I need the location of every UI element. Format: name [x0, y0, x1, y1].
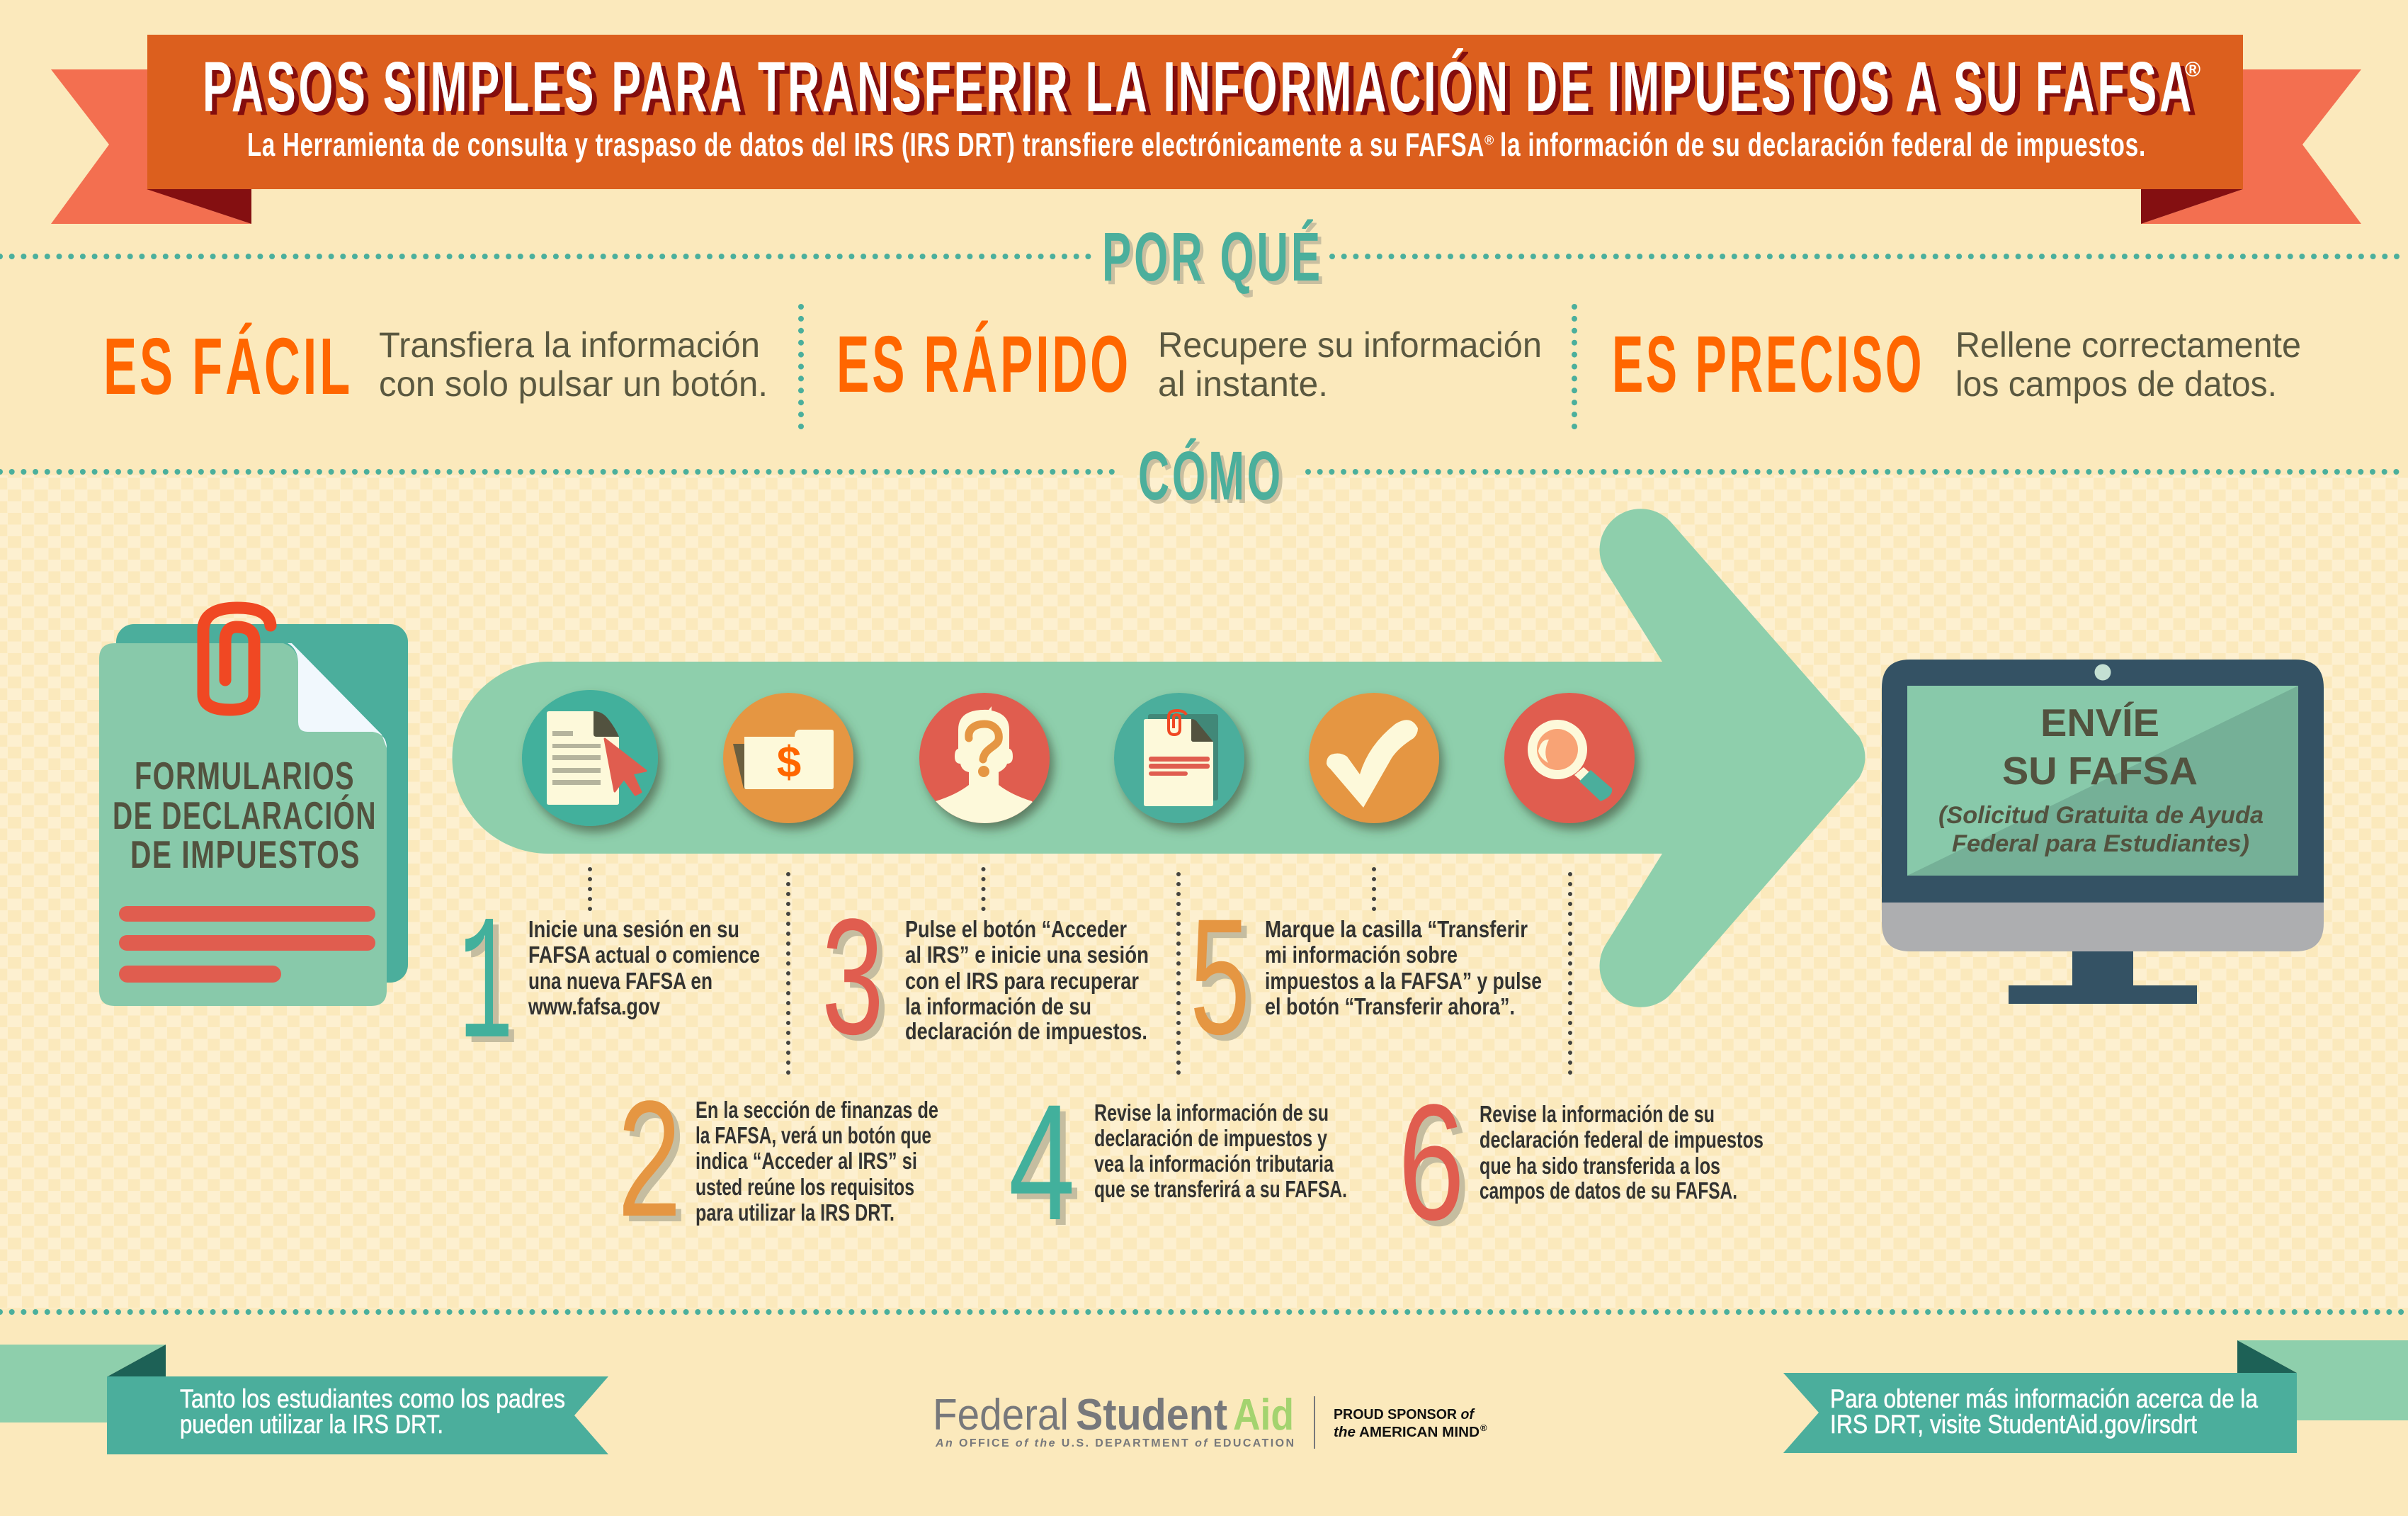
back sheet: [733, 744, 747, 788]
screen text: ENVÍE: [2040, 701, 2159, 745]
paper clip: [1169, 711, 1186, 735]
ribbon tail: [0, 1345, 166, 1422]
dollar sign: $: [777, 738, 801, 787]
ribbon text: IRS DRT, visite StudentAid.gov/irsdrt: [1830, 1410, 2198, 1439]
step 3 text: con el IRS para recuperar: [905, 968, 1139, 994]
screen text: Federal para Estudiantes): [1952, 830, 2249, 857]
left fold: [147, 189, 251, 224]
sponsor text: ®: [1480, 1422, 1487, 1433]
monitor: envíe su fafsa: [1882, 660, 2324, 1004]
logo: federal student aid: [933, 1391, 1487, 1449]
step 2: [618, 1067, 938, 1251]
es rápido heading: ES RÁPIDO: [836, 319, 1131, 409]
screen: [1907, 686, 2298, 876]
step 6 text: [1480, 1101, 1764, 1204]
circle: [522, 690, 658, 826]
es preciso description: los campos de datos.: [1955, 364, 2277, 404]
ribbon fold: [2237, 1340, 2297, 1373]
panel: es rápido: [836, 319, 1542, 409]
monitor base: [1882, 900, 2324, 951]
es rápido description: al instante.: [1158, 364, 1328, 404]
icon: step 1 document and cursor: [522, 690, 658, 826]
wordmark: [933, 1391, 1294, 1439]
question mark: [969, 724, 999, 777]
paper clip: [203, 608, 271, 710]
connector: [1574, 767, 1589, 781]
monitor frame: [1882, 660, 2324, 903]
circle: [1114, 693, 1244, 823]
step 6 text: declaración federal de impuestos: [1480, 1126, 1764, 1153]
banner body: [147, 35, 2243, 189]
step 4 text: que se transferirá a su FAFSA.: [1094, 1176, 1347, 1202]
ribbon text: [1830, 1384, 2258, 1439]
step 1 text: FAFSA actual o comience: [528, 941, 760, 968]
step 6 text: campos de datos de su FAFSA.: [1480, 1177, 1737, 1204]
sponsor text: the AMERICAN MIND: [1334, 1425, 1480, 1440]
ribbon text: Para obtener más información acerca de la: [1830, 1384, 2258, 1413]
es fácil description: con solo pulsar un botón.: [379, 364, 768, 404]
document title: FORMULARIOS: [135, 754, 355, 798]
step 2 text: En la sección de finanzas de: [695, 1097, 938, 1123]
text lines: [552, 731, 601, 785]
es preciso heading: ES PRECISO: [1612, 319, 1924, 409]
es fácil description: Transfiera la información: [379, 325, 760, 365]
step 5 text: el botón “Transferir ahora”.: [1265, 993, 1515, 1019]
check: [1327, 720, 1418, 808]
screen reflection: [1907, 686, 2298, 876]
subtitle: la información de su declaración federal de impuestos.: [1500, 126, 2146, 163]
step 4 text: [1094, 1099, 1347, 1202]
title banner: [51, 35, 2361, 224]
step 3 text: Pulse el botón “Acceder: [905, 916, 1127, 942]
step 5 text: impuestos a la FAFSA” y pulse: [1265, 968, 1542, 994]
circle: [1309, 693, 1439, 823]
step 6 text: Revise la información de su: [1480, 1101, 1715, 1127]
monitor stand: [2009, 949, 2197, 1004]
subtitle: ®: [1484, 133, 1494, 147]
document: [547, 711, 619, 805]
es rápido description: Recupere su información: [1158, 325, 1542, 365]
es fácil description: [379, 325, 768, 404]
step 4 text: vea la información tributaria: [1094, 1150, 1334, 1177]
icon: step 4 clipped document: [1114, 693, 1244, 823]
es preciso description: Rellene correctamente: [1955, 325, 2301, 365]
back sheet: [116, 624, 408, 983]
logo divider: [1314, 1396, 1315, 1449]
circle: [1504, 693, 1635, 823]
ribbon body: [107, 1376, 608, 1454]
logo tagline: An OFFICE of the U.S. DEPARTMENT of EDUCATION: [935, 1437, 1294, 1449]
sponsor text: [1334, 1407, 1487, 1440]
wordmark: Aid: [1233, 1391, 1294, 1439]
step 3 text: [905, 916, 1149, 1044]
step 2 text: [695, 1097, 938, 1226]
icon: step 5 check mark: [1309, 693, 1439, 823]
handle: [1579, 770, 1612, 801]
step 5 text: mi información sobre: [1265, 941, 1458, 968]
es rápido description: [1158, 325, 1542, 404]
screen text: (Solicitud Gratuita de Ayuda: [1938, 802, 2264, 829]
wordmark: Student: [1076, 1391, 1227, 1439]
step 2 text: usted reúne los requisitos: [695, 1174, 914, 1200]
number 4: 4: [1009, 1070, 1075, 1255]
step 2 text: para utilizar la IRS DRT.: [695, 1199, 895, 1226]
footer ribbon: left: [0, 1345, 608, 1454]
step 2 text: la FAFSA, verá un botón que: [695, 1122, 931, 1148]
screen text: SU FAFSA: [2002, 749, 2198, 793]
ribbon tail: [2237, 1340, 2408, 1420]
document title: DE DECLARACIÓN: [113, 793, 377, 837]
camera: [2095, 664, 2111, 680]
back sheet: [1148, 714, 1218, 801]
highlight: [1538, 740, 1549, 763]
title registered mark: ®: [2185, 58, 2200, 81]
wordmark: Federal: [933, 1391, 1069, 1439]
document lines: [119, 906, 375, 983]
number 6: 6: [1398, 1070, 1465, 1255]
step 3 text: al IRS” e inicie una sesión: [905, 941, 1149, 968]
lines: [1149, 757, 1210, 776]
step 1 text: una nueva FAFSA en: [528, 968, 712, 994]
folder: [744, 730, 834, 789]
subtitle: La Herramienta de consulta y traspaso de datos del IRS (IRS DRT) transfiere electrónicamente a su FAFSA: [247, 126, 1484, 163]
ribbon body: [1783, 1373, 2297, 1453]
corner fold: [1191, 719, 1213, 742]
front sheet: [99, 643, 387, 1006]
folded corner: [288, 643, 387, 748]
step 6: [1398, 1070, 1764, 1255]
number 1: 1: [459, 888, 513, 1090]
step 1 text: www.fafsa.gov: [528, 993, 661, 1019]
heading: cómo: CÓMO: [1138, 437, 1283, 514]
step 1 text: [528, 916, 760, 1019]
es fácil heading: ES FÁCIL: [103, 322, 353, 411]
step 3 text: declaración de impuestos.: [905, 1018, 1147, 1044]
number 2: 2: [618, 1067, 681, 1251]
panel: es fácil: [103, 322, 768, 411]
person silhouette: [936, 706, 1033, 823]
step 3 text: la información de su: [905, 993, 1091, 1019]
ribbon text: [180, 1384, 565, 1439]
ribbon text: pueden utilizar la IRS DRT.: [180, 1410, 443, 1439]
sheet: [1144, 719, 1213, 806]
step 2 text: indica “Acceder al IRS” si: [695, 1148, 917, 1174]
step 5 text: [1265, 916, 1542, 1019]
number 3: 3: [822, 885, 884, 1069]
step 1: [459, 888, 760, 1090]
arrow: [452, 509, 1865, 1007]
document title: [113, 754, 377, 876]
left ribbon tail: [51, 69, 251, 224]
step 6 text: que ha sido transferida a los: [1480, 1153, 1720, 1179]
icon: step 6 magnifying glass: [1504, 693, 1635, 823]
step 4 text: declaración de impuestos y: [1094, 1125, 1327, 1151]
step 5: [1190, 885, 1542, 1069]
right fold: [2141, 189, 2243, 224]
circle: [723, 693, 853, 823]
screen text: [1938, 701, 2264, 857]
step 3: [822, 885, 1149, 1069]
icon: step 2 folder with dollar: [723, 693, 853, 823]
step 4 text: Revise la información de su: [1094, 1099, 1329, 1126]
checkered background panel: [0, 475, 2408, 1308]
step 5 text: Marque la casilla “Transferir: [1265, 916, 1528, 942]
heading: por qué: POR QUÉ: [1102, 218, 1323, 295]
cursor: [605, 739, 646, 795]
number 5: 5: [1190, 885, 1250, 1069]
sponsor text: PROUD SPONSOR of: [1334, 1407, 1475, 1422]
es preciso description: [1955, 325, 2301, 404]
right ribbon tail: [2141, 69, 2361, 224]
circle: [919, 693, 1050, 823]
document title: DE IMPUESTOS: [130, 832, 360, 876]
corner fold: [594, 711, 619, 737]
step 4: [1009, 1070, 1347, 1255]
footer ribbon: right: [1783, 1340, 2408, 1453]
ring: [1528, 720, 1587, 779]
icon: tax forms document: [99, 608, 408, 1006]
step 1 text: Inicie una sesión en su: [528, 916, 739, 942]
icon: step 3 person with question mark: [919, 693, 1050, 829]
ribbon fold: [108, 1345, 166, 1376]
lens: [1537, 729, 1578, 770]
panel: es preciso: [1612, 319, 2301, 409]
ribbon text: Tanto los estudiantes como los padres: [180, 1384, 565, 1413]
